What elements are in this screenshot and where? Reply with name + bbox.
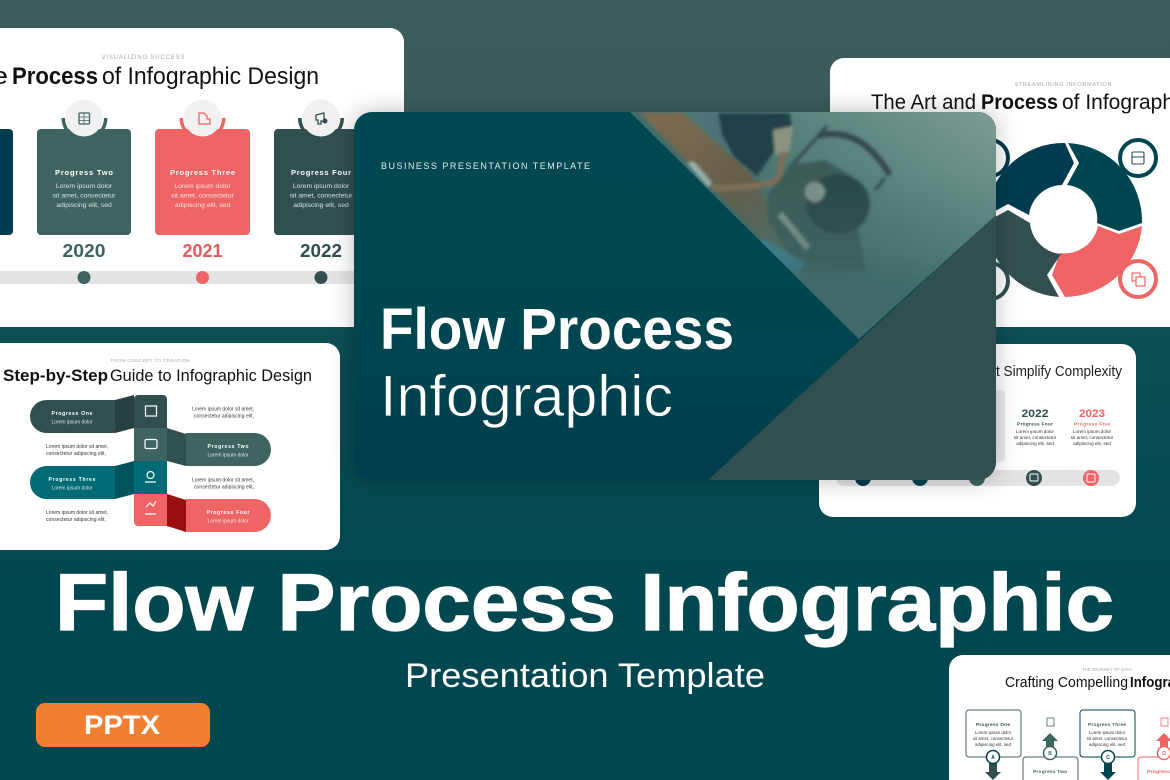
step: progress three: Lorem ipsum dolor — [52, 486, 93, 492]
step descriptions — [46, 406, 254, 523]
panel: simplify complexity slide — [819, 344, 1136, 517]
card: progress four: Lorem ipsum dolor — [293, 183, 350, 190]
column: 2022: Lorem ipsum dolor — [1016, 429, 1054, 434]
column: 2023: Lorem ipsum dolor — [1073, 429, 1111, 434]
badge: PPTX — [36, 703, 210, 747]
cover eyebrow: BUSINESS PRESENTATION TEMPLATE — [381, 161, 590, 171]
card: progress two: Lorem ipsum dolor — [56, 183, 113, 190]
slide title: Step-by-Step — [3, 366, 108, 385]
step: progress four: Lorem ipsum dolor — [208, 518, 249, 524]
column: 2023: 2023 — [1079, 408, 1105, 420]
step descriptions: consectetur adipiscing elit, — [46, 451, 106, 457]
column: 2023 — [1071, 408, 1114, 446]
column: 2023: adipiscing elit, sed — [1073, 441, 1111, 446]
box: progress four: D — [1162, 751, 1166, 757]
box: progress three: C — [1106, 755, 1110, 761]
step: progress four: Progress Four — [206, 510, 250, 516]
column: 2022 — [1014, 408, 1057, 446]
card: progress one — [0, 129, 13, 235]
card: progress four: sit amet, consectetur — [290, 192, 353, 200]
slide eyebrow: THE JOURNEY OF DATA — [1082, 667, 1132, 672]
panel: crafting compelling slide — [949, 655, 1170, 780]
step: progress two: Progress Two — [208, 444, 248, 450]
slide title — [3, 366, 312, 385]
step descriptions: Lorem ipsum dolor sit amet, — [46, 510, 108, 516]
photo: team at table — [620, 105, 1000, 345]
slide title: The Art and — [871, 90, 976, 114]
slide title — [1006, 676, 1170, 690]
box: progress two — [1023, 718, 1078, 780]
step descriptions: Lorem ipsum dolor sit amet, — [192, 406, 254, 412]
box: progress one: A — [991, 755, 995, 761]
box: progress four: Progress — [1147, 769, 1170, 775]
card: progress three: Lorem ipsum dolor — [174, 183, 231, 190]
step descriptions: Lorem ipsum dolor sit amet, — [192, 478, 254, 484]
step: progress three — [30, 461, 134, 499]
box: progress one — [966, 710, 1021, 780]
slide eyebrow: FROM CONCEPT TO CREATION — [110, 358, 190, 364]
cover title: Flow Process — [380, 297, 734, 362]
slide title: Process — [981, 90, 1058, 114]
icon: bottom right circle — [1120, 261, 1156, 297]
panel: art and process slide — [830, 58, 1170, 327]
card: progress two: 2020 — [62, 241, 106, 261]
slide title — [871, 94, 1170, 114]
column: 2022: adipiscing elit, sed — [1016, 441, 1054, 446]
step: progress three: Progress Three — [48, 477, 96, 483]
box: progress three: Lorem ipsum dolor — [1089, 730, 1126, 735]
donut chart — [986, 143, 1142, 297]
box: progress one: sit amet, consectetur — [973, 736, 1014, 741]
step descriptions: consectetur adipiscing elit, — [46, 517, 106, 523]
timeline — [0, 271, 354, 284]
main heading: Flow Process Infographic — [55, 558, 1114, 648]
cover title — [380, 297, 734, 429]
icon: bottom left circle — [996, 262, 1010, 300]
card: progress four: Progress Four — [291, 168, 351, 177]
step descriptions: consectetur adipiscing elit, — [194, 484, 254, 490]
slide title: Crafting Compelling — [1005, 675, 1128, 691]
step: progress one: Progress One — [52, 411, 93, 417]
step: progress two: Lorem ipsum dolor — [208, 452, 249, 458]
card: progress three: adipiscing elit, sed — [175, 202, 230, 209]
flow column — [134, 395, 167, 526]
card: progress two: adipiscing elit, sed — [56, 202, 112, 209]
card: progress four: adipiscing elit, sed — [293, 202, 349, 209]
box: progress one: adipiscing elit, sed — [975, 742, 1011, 747]
box: progress one: Lorem ipsum dolor — [975, 730, 1012, 735]
panel: step by step guide slide — [0, 343, 340, 550]
card: progress three: Progress Three — [170, 168, 235, 177]
card: progress four: 2022 — [300, 241, 342, 261]
step: progress one — [30, 395, 134, 433]
step: progress two — [167, 428, 271, 466]
badge: PPTX: PPTX — [84, 710, 160, 740]
slide eyebrow: STREAMLINING INFORMATION — [1014, 82, 1112, 88]
card: progress three: 2021 — [182, 241, 222, 261]
box: progress one: Progress One — [976, 722, 1010, 728]
panel: process of infographic design slide — [0, 28, 404, 327]
panel: main cover slide — [354, 105, 1000, 480]
slide title: of Infographic Design — [102, 63, 319, 90]
column: 2023: Progress Five — [1074, 422, 1110, 428]
box: progress two: Progress Two — [1033, 769, 1067, 775]
card: progress three — [155, 100, 250, 261]
column: 2022: 2022 — [1022, 408, 1048, 420]
slide title: t Simplify Complexity — [996, 364, 1123, 380]
card: progress three: sit amet, consectetur — [171, 192, 235, 200]
box: progress three: Progress Three — [1088, 722, 1126, 728]
icon: top left circle — [996, 139, 1010, 177]
card: progress two — [37, 100, 131, 261]
box: progress three: adipiscing elit, sed — [1089, 742, 1125, 747]
timeline — [836, 470, 1120, 486]
card: progress four — [274, 100, 354, 257]
card: progress two: Progress Two — [55, 168, 113, 177]
slide title: Process — [12, 63, 98, 90]
box: progress three — [1080, 710, 1135, 780]
step: progress four — [167, 494, 271, 532]
card: progress two: sit amet, consectetur — [53, 192, 116, 200]
box: progress two: B — [1048, 751, 1052, 757]
step descriptions: consectetur adipiscing elit, — [194, 414, 254, 420]
cover title: Infographic — [380, 364, 673, 429]
box: progress three: sit amet, consectetur — [1087, 736, 1128, 741]
column: 2023: sit amet, consectetur — [1071, 435, 1114, 440]
subheading: Presentation Template — [405, 657, 765, 695]
step descriptions: Lorem ipsum dolor sit amet, — [46, 444, 108, 450]
shape: grey corner triangle — [708, 215, 996, 480]
slide title: Guide to Infographic Design — [110, 366, 312, 385]
slide eyebrow: VISUALIZING SUCCESS — [102, 55, 184, 61]
box: progress four — [1138, 718, 1170, 780]
column: 2022: sit amet, consectetur — [1014, 435, 1057, 440]
slide title — [0, 66, 318, 89]
step: progress one: Lorem ipsum dolor — [52, 420, 93, 426]
column: 2022: Progress Four — [1017, 422, 1053, 428]
icon: top right circle — [1120, 140, 1156, 176]
highlighted column — [950, 390, 1005, 462]
